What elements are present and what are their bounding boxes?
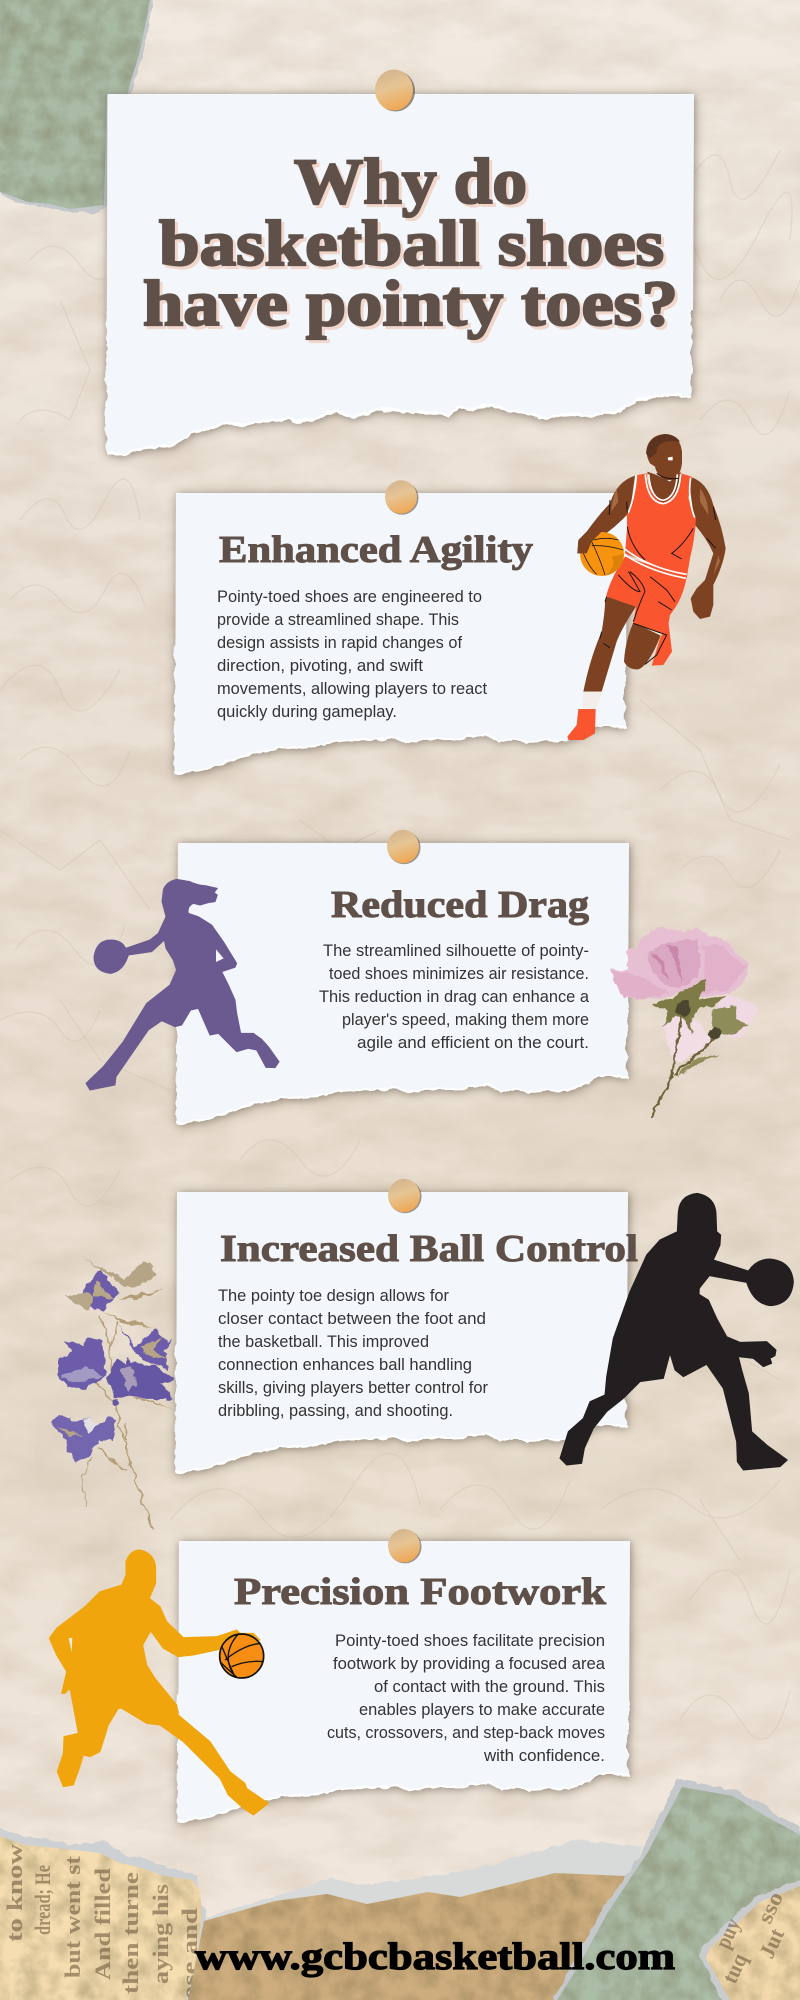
heading: Enhanced Agility <box>219 529 533 571</box>
panel: Increased Ball Control <box>175 1179 628 1472</box>
body text: Pointy-toed shoes facilitate precision <box>335 1632 605 1650</box>
torn paper collage bottom <box>0 1779 800 2000</box>
newsprint paper right: sso <box>752 1888 788 1927</box>
pin <box>387 830 420 864</box>
body text: of contact with the ground. This <box>374 1678 605 1696</box>
body text: the basketball. This improved <box>218 1333 429 1351</box>
torn paper sheet <box>177 1541 630 1821</box>
body text: movements, allowing players to react <box>217 680 487 698</box>
pin <box>388 1179 422 1213</box>
body text <box>218 1287 488 1420</box>
icon: yellow player with basketball <box>49 1550 268 1815</box>
body text <box>217 588 487 721</box>
body text: toed shoes minimizes air resistance. <box>329 965 589 983</box>
icon: pressed pink rose <box>609 927 757 1115</box>
torn paper sheet <box>175 1192 628 1472</box>
newsprint paper left <box>0 1828 206 2000</box>
body text <box>327 1632 606 1765</box>
title text <box>143 146 678 340</box>
newsprint paper left: but went st <box>60 1855 85 1978</box>
torn paper sheet <box>176 843 629 1123</box>
icon: black player silhouette <box>560 1193 793 1470</box>
body text: design assists in rapid changes of <box>217 634 462 652</box>
newsprint paper left: aying his <box>148 1883 173 1984</box>
body text: enables players to make accurate <box>359 1701 605 1719</box>
body text: dribbling, passing, and shooting. <box>218 1402 453 1420</box>
body text: Pointy-toed shoes are engineered to <box>217 588 482 606</box>
website url: www.gcbcbasketball.com <box>195 1936 675 1978</box>
newsprint paper left: to know <box>2 1844 27 1942</box>
basketball <box>220 1634 264 1678</box>
tan canvas paper middle <box>188 1840 643 2000</box>
panel: Reduced Drag <box>176 830 629 1123</box>
newsprint paper left: ose and <box>177 1908 202 2000</box>
green paper right <box>551 1779 800 2000</box>
title text: basketball shoes <box>159 208 664 280</box>
body text: direction, pivoting, and swift <box>217 657 423 675</box>
newsprint paper right: tuq <box>717 1949 753 1987</box>
torn paper sheet <box>106 94 694 456</box>
torn green paper top left <box>0 0 153 214</box>
body text: The pointy toe design allows for <box>218 1287 449 1305</box>
newsprint paper right: Jut <box>754 1924 789 1962</box>
body text: with confidence. <box>483 1747 605 1765</box>
newsprint paper left: dread; He <box>30 1865 55 1935</box>
body text <box>319 942 590 1052</box>
body text: quickly during gameplay. <box>217 703 397 721</box>
pin <box>388 1529 422 1563</box>
body text: cuts, crossovers, and step-back moves <box>327 1724 605 1742</box>
torn paper sheet <box>174 493 627 773</box>
newsprint paper right: puy <box>710 1914 745 1952</box>
title pin <box>375 70 415 112</box>
heading: Increased Ball Control <box>220 1228 638 1270</box>
title text: Why do <box>294 146 527 218</box>
title card <box>106 70 694 456</box>
body text: connection enhances ball handling <box>218 1356 472 1374</box>
body text: provide a streamlined shape. This <box>217 611 459 629</box>
heading and body of Increased Ball Control <box>218 1228 638 1420</box>
icon: orange basketball player <box>567 434 726 740</box>
panel: Enhanced Agility <box>174 480 627 773</box>
panel: Precision Footwork <box>177 1529 630 1821</box>
icon: purple player silhouette <box>86 879 279 1090</box>
newsprint paper left: then turne <box>118 1872 143 1994</box>
title text: have pointy toes? <box>143 268 678 340</box>
body text: skills, giving players better control for <box>218 1379 488 1397</box>
heading: Precision Footwork <box>234 1571 607 1613</box>
newsprint paper left: And filled <box>90 1868 115 1980</box>
newsprint paper right <box>699 1878 800 2000</box>
body text: This reduction in drag can enhance a <box>319 988 590 1006</box>
pin <box>385 480 418 515</box>
body text: player's speed, making them more <box>342 1011 589 1029</box>
body text: footwork by providing a focused area <box>333 1655 606 1673</box>
body text: closer contact between the foot and <box>218 1310 486 1328</box>
icon: pressed purple flower <box>52 1257 175 1530</box>
body text: agile and efficient on the court. <box>357 1034 589 1052</box>
body text: The streamlined silhouette of pointy- <box>323 942 589 960</box>
heading: Reduced Drag <box>331 884 589 926</box>
